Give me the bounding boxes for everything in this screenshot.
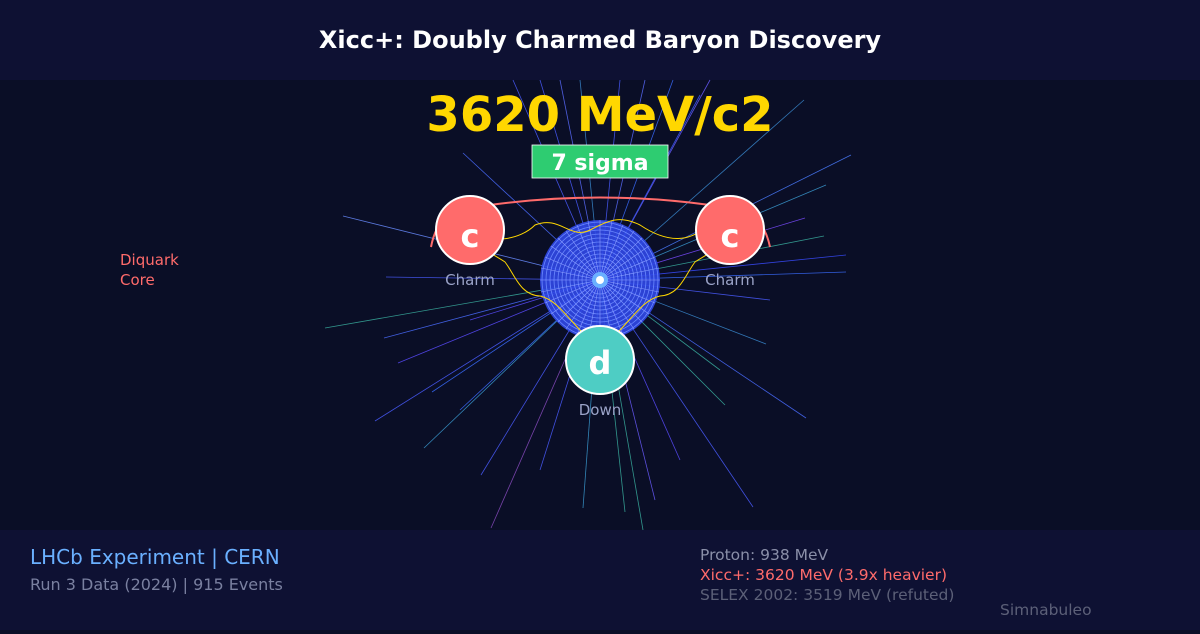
quark: charm left: Charm xyxy=(445,271,495,289)
quark: charm right xyxy=(696,196,764,289)
sigma badge: 7 sigma xyxy=(551,151,649,176)
footer: SELEX 2002: 3519 MeV (refuted) xyxy=(700,586,954,604)
footer: Simnabuleo xyxy=(1000,601,1092,619)
footer: Run 3 Data (2024) | 915 Events xyxy=(30,575,283,594)
diquark arc xyxy=(431,198,770,247)
quark: charm right: c xyxy=(721,217,739,255)
mass headline: 3620 MeV/c2 xyxy=(426,87,774,143)
diquark label: Diquark xyxy=(120,251,179,269)
footer: Xicc+: 3620 MeV (3.9x heavier) xyxy=(700,566,947,584)
title: Xicc+: Doubly Charmed Baryon Discovery xyxy=(319,26,881,54)
quark: down: d xyxy=(589,344,611,382)
quark: charm left: c xyxy=(461,217,479,255)
quark: down: Down xyxy=(579,401,621,419)
footer left: LHCb Experiment | CERN xyxy=(30,545,280,569)
footer comparison: Proton: 938 MeV xyxy=(700,546,829,564)
energy sphere xyxy=(540,220,660,340)
quark: charm left xyxy=(436,196,504,289)
footer xyxy=(0,530,1200,630)
diquark label: Core xyxy=(120,271,155,289)
quark: down xyxy=(566,326,634,419)
diquark label xyxy=(120,251,179,289)
header bar xyxy=(0,0,1200,80)
sigma badge xyxy=(532,145,668,178)
quark: charm right: Charm xyxy=(705,271,755,289)
particle tracks xyxy=(325,80,851,530)
gluon lines xyxy=(470,220,730,355)
